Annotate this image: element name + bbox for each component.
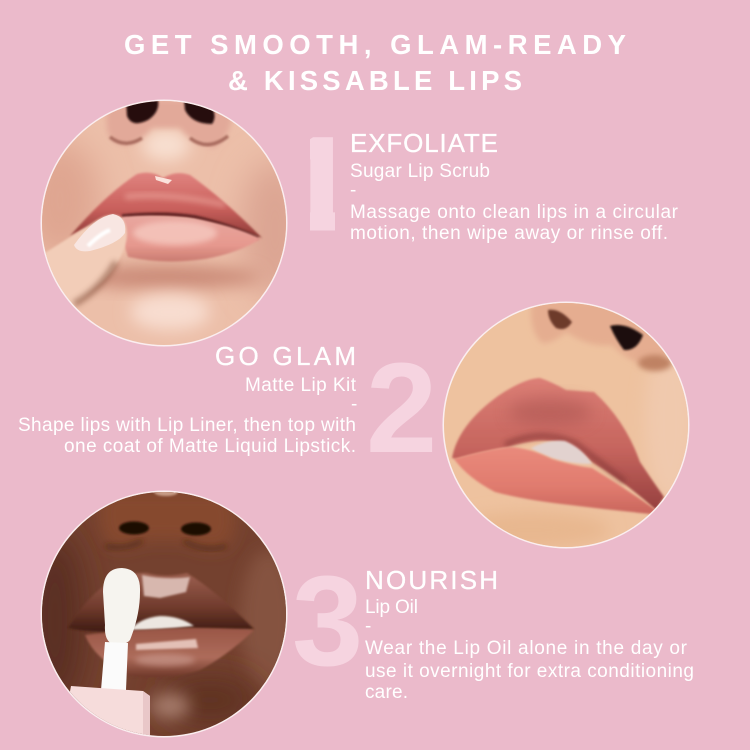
step 2 number: 2 <box>366 337 437 480</box>
photo: exfoliating lips with scrub <box>40 100 288 346</box>
upper lip <box>68 573 254 632</box>
step 2 text: go glam: Shape lips with Lip Liner, then top with <box>18 415 356 436</box>
step 1 text: exfoliate: EXFOLIATE <box>350 128 498 158</box>
step 2 text: go glam: - <box>351 394 357 415</box>
step 1 text: exfoliate: motion, then wipe away or rinse off. <box>350 223 668 244</box>
lower lip <box>85 628 254 677</box>
step 1 text: exfoliate: Sugar Lip Scrub <box>350 161 490 182</box>
packaging cap <box>70 686 150 735</box>
step 3 text: nourish: use it overnight for extra conditioning <box>365 661 694 682</box>
title <box>124 29 626 96</box>
step 2 text: go glam: GO GLAM <box>215 341 356 371</box>
step 2 text: go glam <box>18 341 357 457</box>
step 3 text: nourish: NOURISH <box>365 565 498 595</box>
step 3 text: nourish: care. <box>365 682 408 703</box>
step 2 text: go glam: one coat of Matte Liquid Lipstick. <box>64 436 356 457</box>
step 3 text: nourish: Wear the Lip Oil alone in the day or <box>365 638 688 659</box>
teeth <box>130 616 194 630</box>
title: & KISSABLE LIPS <box>228 65 522 96</box>
upper lip <box>70 173 262 238</box>
step 3 text: nourish <box>365 565 694 703</box>
step 1 text: exfoliate <box>350 128 679 244</box>
applicator <box>103 568 140 644</box>
nose <box>99 490 236 549</box>
lower lip <box>454 447 656 514</box>
step 1 number: 1 <box>283 113 354 256</box>
title: GET SMOOTH, GLAM-READY <box>124 29 626 60</box>
step 3 text: nourish: Lip Oil <box>365 597 418 618</box>
photo: matte lip kit lips <box>440 300 695 550</box>
step 1 text: exfoliate: - <box>350 180 356 201</box>
finger <box>38 215 127 306</box>
step 1 text: exfoliate: Massage onto clean lips in a circular <box>350 202 679 223</box>
step 3 number: 3 <box>292 550 363 693</box>
teeth <box>531 441 592 464</box>
lower lip <box>122 216 261 262</box>
step 3 text: nourish: - <box>365 616 371 637</box>
nose <box>106 100 232 148</box>
upper lip <box>452 378 664 510</box>
nose <box>530 303 666 362</box>
step 2 text: go glam: Matte Lip Kit <box>245 375 357 396</box>
photo: lip oil applicator on lips <box>40 490 288 738</box>
